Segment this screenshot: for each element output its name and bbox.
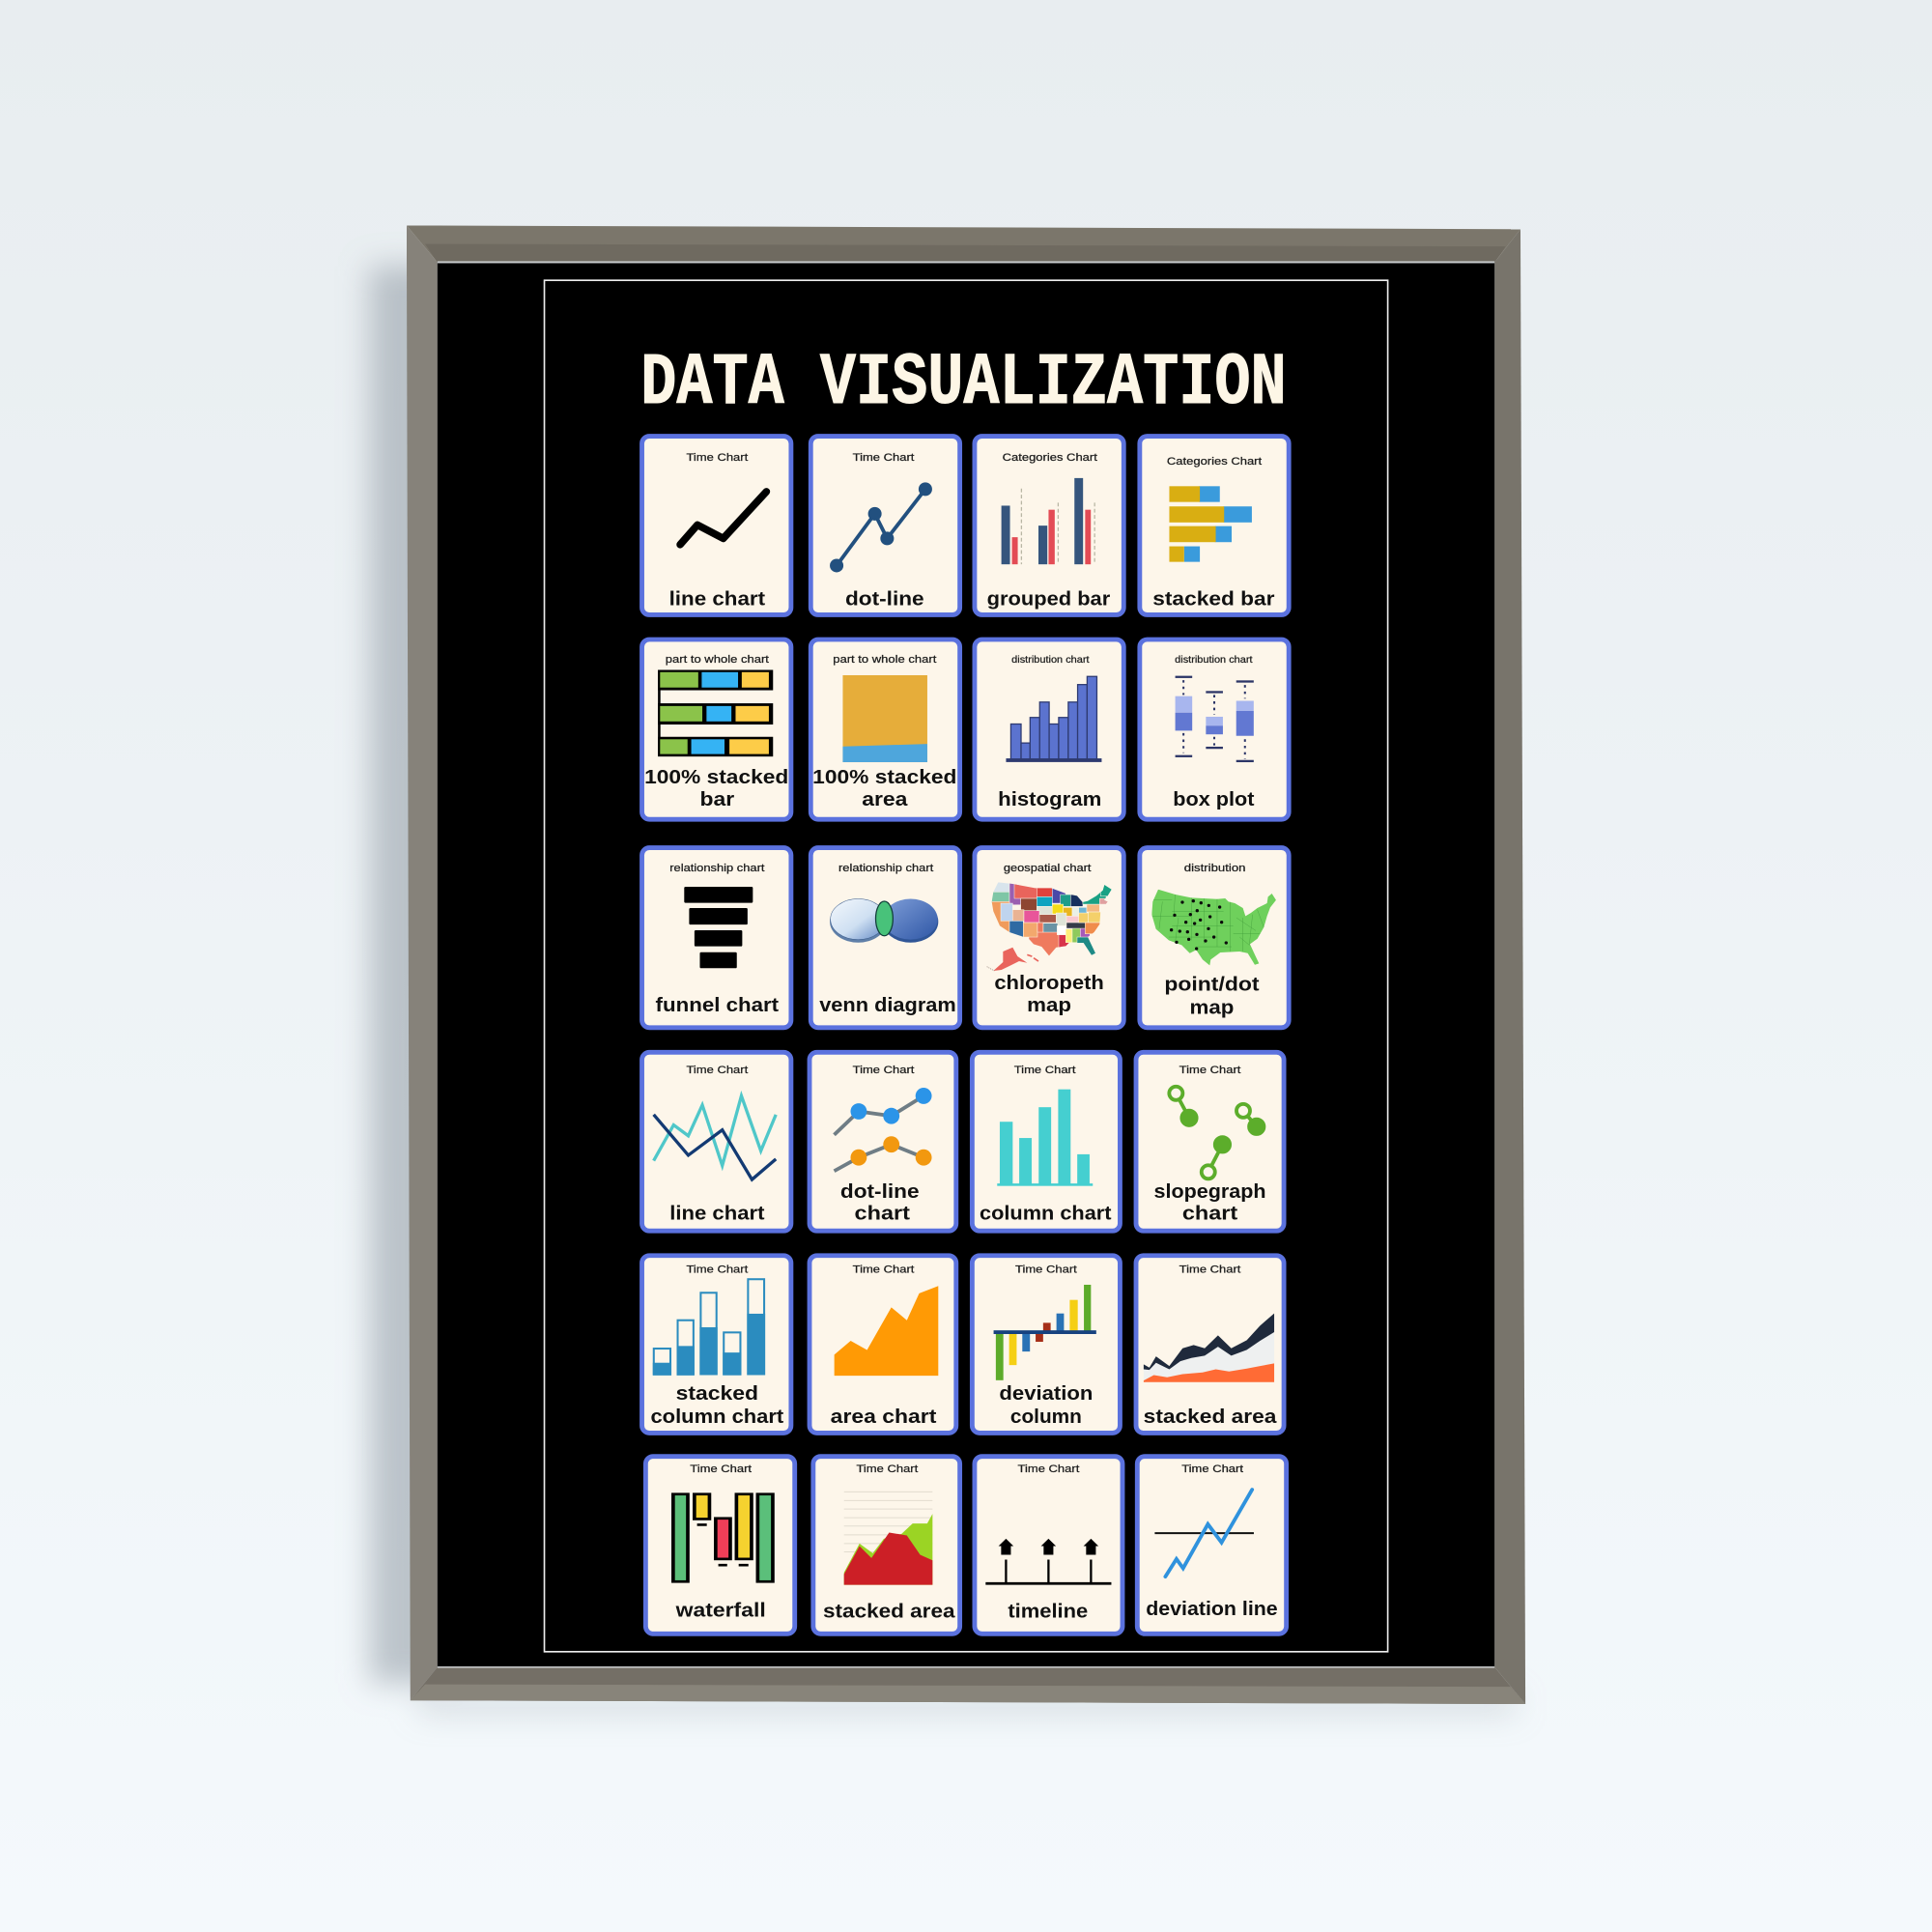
card name line 2: chart bbox=[855, 1204, 910, 1225]
card category label: Time Chart bbox=[853, 1264, 915, 1276]
card name: stacked bar bbox=[1152, 588, 1275, 610]
icon: histogram bbox=[1007, 676, 1101, 761]
card category label: distribution bbox=[1184, 863, 1246, 874]
card name line 2: area bbox=[862, 789, 908, 810]
card: deviation line bbox=[1137, 1457, 1287, 1634]
card: histogram bbox=[975, 639, 1123, 819]
card name: grouped bar bbox=[987, 588, 1110, 610]
icon: funnel chart bbox=[684, 887, 753, 968]
card: waterfall bbox=[645, 1457, 795, 1634]
card category label: Time Chart bbox=[853, 1065, 915, 1076]
card: dot-line chart bbox=[810, 1052, 956, 1231]
icon: stacked column chart bbox=[653, 1279, 765, 1375]
card: timeline bbox=[975, 1457, 1122, 1634]
frame shadow bbox=[370, 267, 1516, 1713]
card category label: part to whole chart bbox=[666, 654, 770, 666]
card: line chart 2 bbox=[642, 1052, 791, 1231]
icon: grouped bar chart bbox=[1002, 478, 1094, 564]
card: point/dot map bbox=[1140, 848, 1289, 1028]
card category label: Time Chart bbox=[686, 1065, 749, 1076]
card name: chloropeth bbox=[994, 973, 1104, 994]
card name line 2: map bbox=[1027, 995, 1071, 1016]
card name: deviation bbox=[999, 1383, 1093, 1405]
card category label: Time Chart bbox=[1179, 1264, 1241, 1276]
card: 100% stacked bar bbox=[642, 639, 791, 819]
card name: waterfall bbox=[674, 1600, 766, 1621]
card name: box plot bbox=[1173, 789, 1255, 810]
card name: line chart bbox=[669, 1204, 765, 1225]
card name line 2: bar bbox=[699, 789, 734, 810]
icon: stacked area chart with grid bbox=[844, 1492, 932, 1585]
card category label: part to whole chart bbox=[833, 654, 937, 666]
card name: area chart bbox=[831, 1406, 937, 1428]
icon: area chart bbox=[835, 1286, 938, 1376]
icon: venn diagram bbox=[830, 898, 938, 943]
card category label: geospatial chart bbox=[1004, 863, 1092, 874]
card name line 2: chart bbox=[1182, 1204, 1237, 1225]
title: DATA VISUALIZATION bbox=[640, 341, 1287, 425]
card category label: relationship chart bbox=[838, 863, 934, 874]
card name: dot-line bbox=[845, 588, 924, 610]
card: venn diagram bbox=[810, 848, 960, 1028]
card name: column chart bbox=[980, 1204, 1112, 1225]
card: funnel chart bbox=[642, 848, 791, 1028]
card: line chart bbox=[642, 437, 791, 614]
icon: column chart bbox=[997, 1090, 1093, 1186]
icon: multi-line chart bbox=[654, 1095, 776, 1179]
card: stacked column chart bbox=[642, 1256, 791, 1433]
card: area chart bbox=[810, 1256, 956, 1433]
icon: stacked area chart bbox=[1144, 1314, 1274, 1382]
icon: slopegraph bbox=[1169, 1087, 1265, 1179]
card name line 2: column chart bbox=[650, 1406, 783, 1428]
card: 100% stacked area bbox=[810, 639, 960, 819]
card: dot-line bbox=[810, 437, 960, 614]
card: stacked bar bbox=[1140, 437, 1289, 614]
card category label: Time Chart bbox=[1018, 1463, 1080, 1475]
card name line 2: column bbox=[1010, 1406, 1082, 1428]
card category label: Time Chart bbox=[1014, 1065, 1077, 1076]
icon: alaska and hawaii bbox=[987, 948, 1038, 971]
icon: dot line chart bbox=[830, 482, 932, 572]
card name line 2: map bbox=[1190, 998, 1234, 1019]
card category label: Time Chart bbox=[1181, 1463, 1244, 1475]
icon: choropleth map of USA bbox=[990, 881, 1112, 957]
card: deviation column bbox=[972, 1256, 1120, 1433]
icon: deviation line chart bbox=[1154, 1490, 1254, 1577]
card category label: Categories Chart bbox=[1167, 456, 1263, 468]
icon: box plot bbox=[1176, 676, 1254, 762]
icon: timeline bbox=[985, 1539, 1111, 1583]
card category label: Time Chart bbox=[1015, 1264, 1078, 1276]
card category label: Time Chart bbox=[856, 1463, 919, 1475]
card: stacked area 2 bbox=[813, 1457, 960, 1634]
card: box plot bbox=[1140, 639, 1289, 819]
card category label: Time Chart bbox=[690, 1463, 753, 1475]
card name: stacked bbox=[676, 1383, 758, 1405]
card category label: Time Chart bbox=[686, 1264, 749, 1276]
icon: 100% stacked area chart bbox=[842, 675, 927, 762]
card name: venn diagram bbox=[819, 995, 956, 1016]
card: grouped bar bbox=[975, 437, 1123, 614]
card: slopegraph chart bbox=[1136, 1052, 1284, 1231]
card category label: Time Chart bbox=[1179, 1065, 1241, 1076]
card name: stacked area bbox=[823, 1602, 955, 1623]
card: stacked area bbox=[1136, 1256, 1284, 1433]
icon: two-series dot line chart bbox=[835, 1088, 932, 1171]
card name: 100% stacked bbox=[644, 767, 788, 788]
card name: funnel chart bbox=[656, 995, 779, 1016]
inner white border bbox=[545, 280, 1388, 1652]
card: column chart bbox=[972, 1052, 1120, 1231]
icon: stacked bar chart bbox=[1169, 486, 1252, 562]
card category label: Time Chart bbox=[853, 452, 915, 464]
card name: stacked area bbox=[1144, 1406, 1277, 1428]
icon: deviation column chart bbox=[994, 1285, 1096, 1380]
card name: slopegraph bbox=[1154, 1181, 1266, 1203]
picture frame bbox=[407, 225, 1525, 1704]
icon: line chart bbox=[680, 492, 766, 545]
card category label: Categories Chart bbox=[1003, 452, 1098, 464]
icon: dot map of USA bbox=[1150, 887, 1278, 968]
card name: timeline bbox=[1008, 1602, 1088, 1623]
card name: deviation line bbox=[1146, 1599, 1278, 1620]
card name: histogram bbox=[998, 789, 1101, 810]
card category label: Time Chart bbox=[686, 452, 749, 464]
card name: point/dot bbox=[1164, 975, 1260, 996]
icon: waterfall chart bbox=[673, 1494, 773, 1581]
card category label: distribution chart bbox=[1175, 655, 1253, 666]
icon: 100% stacked bar chart bbox=[658, 669, 773, 756]
card category label: distribution chart bbox=[1011, 655, 1090, 666]
card category label: relationship chart bbox=[669, 863, 765, 874]
card name: 100% stacked bbox=[812, 767, 956, 788]
card name: dot-line bbox=[840, 1181, 920, 1203]
card name: line chart bbox=[669, 588, 765, 610]
map dots bbox=[1170, 899, 1228, 951]
card: chloropeth map bbox=[975, 848, 1123, 1028]
